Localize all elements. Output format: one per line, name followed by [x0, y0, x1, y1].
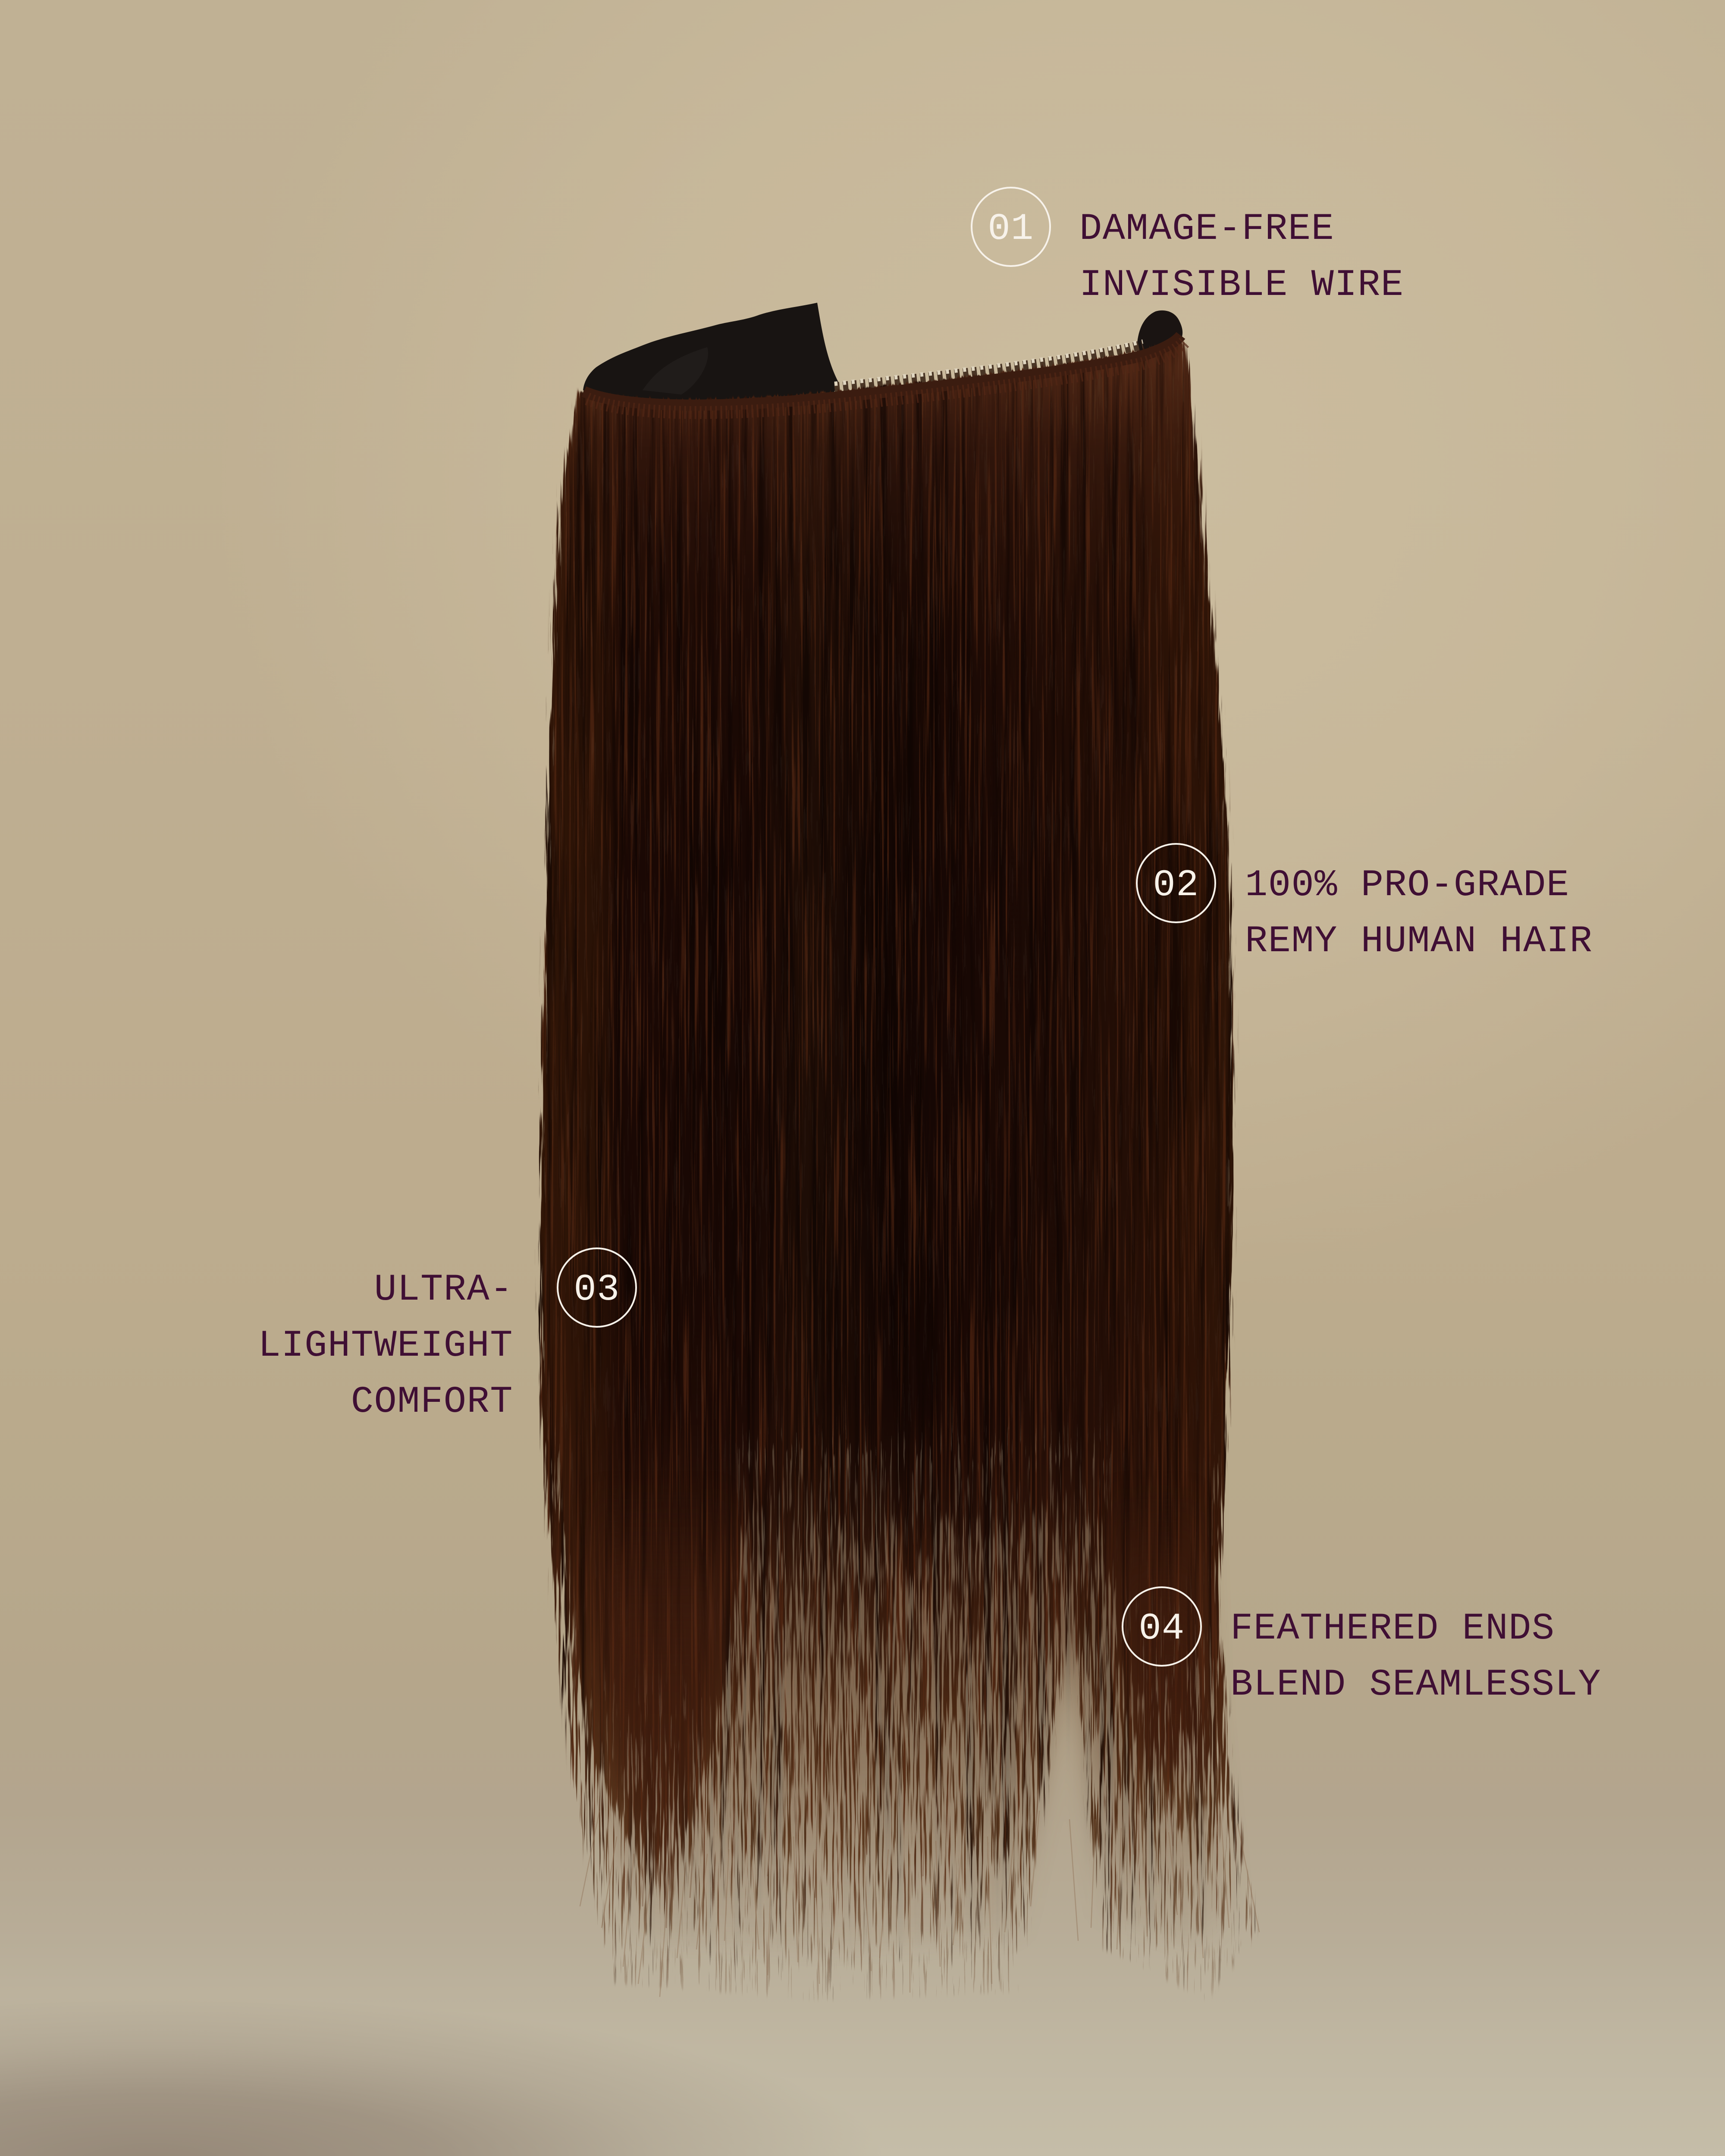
lace comb edge	[834, 342, 1143, 387]
badge 01: 01	[988, 208, 1034, 251]
product: hair extension	[474, 280, 1337, 2027]
fabric base behind the hair	[583, 303, 838, 404]
label 04: FEATHERED ENDS	[1230, 1608, 1555, 1650]
dark right lobe	[1108, 1488, 1216, 1777]
label 03: ULTRA-	[374, 1269, 513, 1311]
label 01: INVISIBLE WIRE	[1079, 264, 1404, 307]
label 02: 100% PRO-GRADE	[1245, 865, 1570, 907]
badge 04	[1123, 1587, 1201, 1666]
stitched weft band	[584, 335, 1185, 413]
dark left lobe	[591, 1488, 729, 1919]
flyaway hair ends	[580, 1725, 1259, 1996]
badge 04: 04	[1138, 1608, 1185, 1650]
badge 03	[558, 1248, 636, 1327]
callout 04: feathered ends	[1123, 1587, 1601, 1706]
callout 01: damage-free invisible wire	[972, 188, 1404, 307]
badge 01	[972, 188, 1050, 266]
label 02: REMY HUMAN HAIR	[1245, 921, 1593, 963]
fabric highlight	[643, 347, 708, 395]
label 01: DAMAGE-FREE	[1079, 208, 1334, 251]
label 03: LIGHTWEIGHT	[258, 1325, 513, 1367]
label 04: BLEND SEAMLESSLY	[1230, 1664, 1601, 1706]
badge 02	[1137, 844, 1215, 922]
wire tab	[1137, 310, 1182, 351]
badge 02: 02	[1153, 865, 1199, 907]
label 03: COMFORT	[351, 1381, 513, 1423]
callout 02: remy human hair	[1137, 844, 1593, 963]
hair strands	[474, 280, 1337, 2027]
callout 03: ultra-lightweight comfort	[258, 1248, 636, 1423]
badge 03: 03	[574, 1269, 620, 1311]
